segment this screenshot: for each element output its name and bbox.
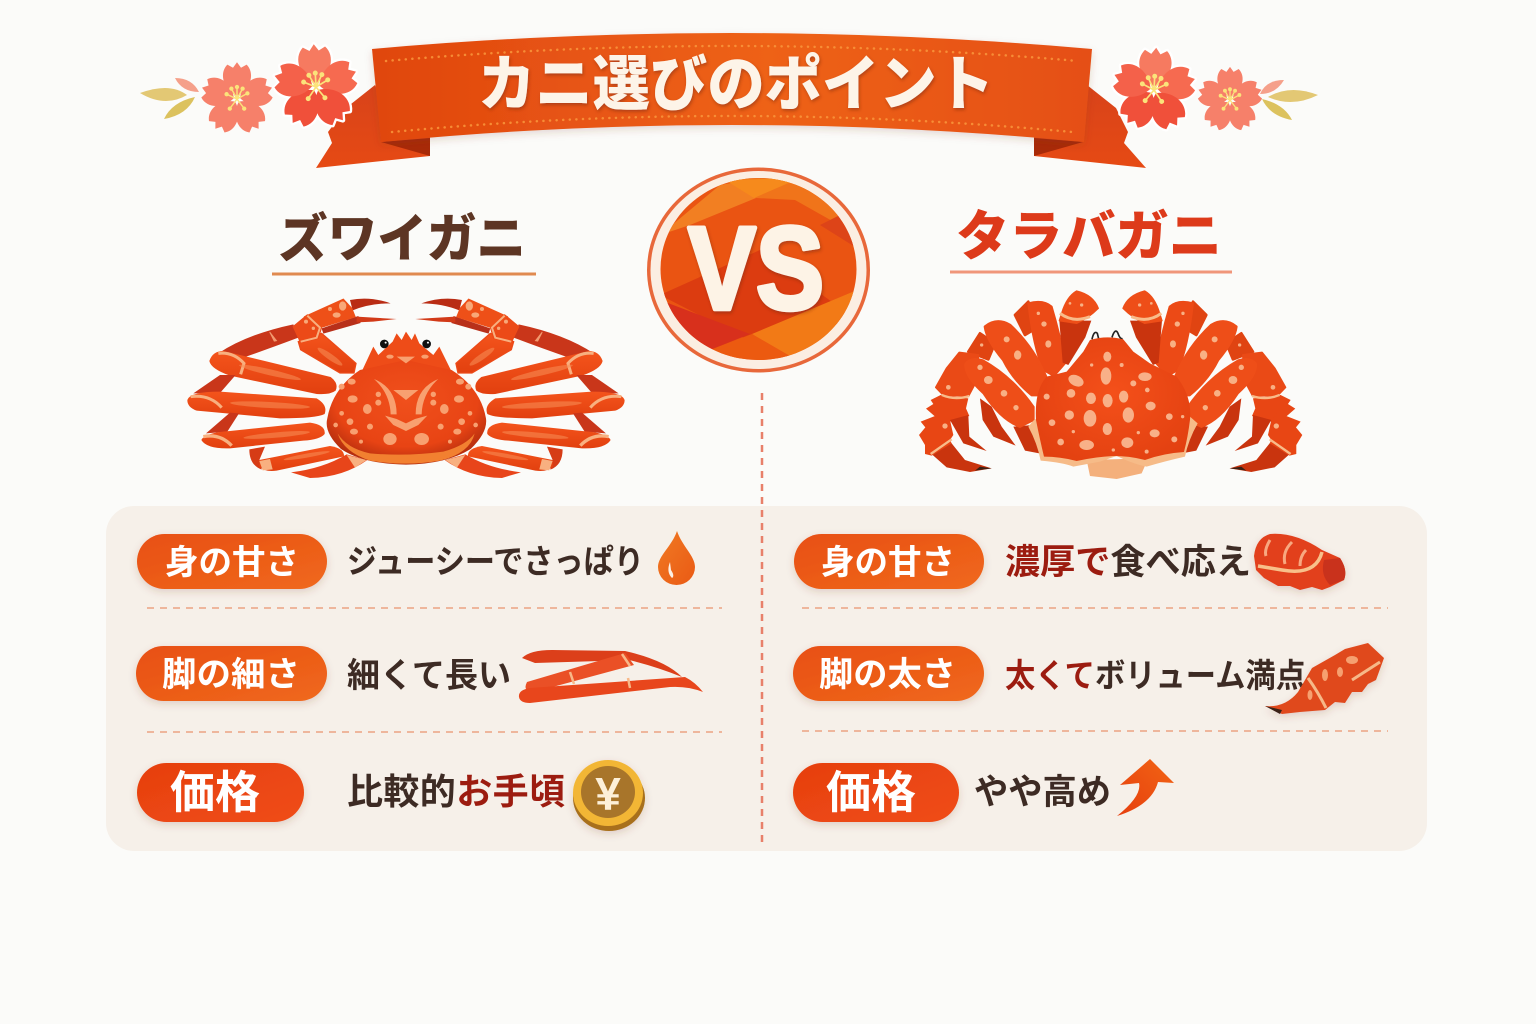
text: thick and hearty: 太くてボリューム満点 bbox=[1005, 657, 1306, 694]
pill: price bbox=[137, 763, 304, 822]
carapace bbox=[327, 360, 486, 465]
pill: price bbox=[793, 763, 959, 822]
pill: price: 価格 bbox=[826, 767, 916, 818]
small blossom bbox=[198, 62, 276, 137]
icon: water drop bbox=[658, 531, 695, 585]
title ribbon bbox=[316, 33, 1146, 168]
pill: price: 価格 bbox=[170, 767, 260, 818]
left column rows bbox=[136, 531, 722, 831]
icon: thin crab legs bbox=[519, 650, 703, 703]
shell rim bbox=[1028, 380, 1198, 467]
ribbon fold shadows bbox=[381, 138, 1083, 156]
left ribbon tail bbox=[316, 85, 430, 168]
carapace markings bbox=[333, 355, 478, 445]
pill: flesh sweetness bbox=[794, 534, 984, 589]
text: somewhat expensive: やや高め bbox=[974, 773, 1111, 812]
illustration: king crab bbox=[919, 291, 1302, 479]
pill: thin legs bbox=[136, 646, 327, 701]
right ribbon tail bbox=[1034, 85, 1146, 168]
leaves bbox=[140, 88, 187, 101]
shell spots bbox=[1044, 352, 1184, 454]
icon: king crab leg bbox=[1265, 643, 1384, 714]
carapace underside bbox=[338, 433, 475, 464]
pill: thick legs bbox=[793, 646, 984, 701]
text: rich and filling: 濃厚で食べ応え bbox=[1005, 543, 1251, 582]
right cherry blossoms bbox=[1107, 45, 1318, 136]
heading: king crab: タラバガニ bbox=[956, 207, 1222, 267]
pill: thick legs: 脚の太さ bbox=[819, 656, 956, 694]
right column rows bbox=[793, 534, 1388, 822]
icon: crab meat bbox=[1254, 534, 1345, 590]
ribbon band bbox=[372, 33, 1092, 142]
pill: flesh sweetness: 身の甘さ bbox=[165, 544, 299, 582]
ribbon stitching bbox=[386, 46, 1078, 132]
VS badge bbox=[647, 168, 870, 372]
under shell bbox=[1087, 458, 1148, 479]
icon: up arrow bbox=[1117, 759, 1174, 816]
spiked head bbox=[362, 332, 452, 372]
pill: flesh sweetness bbox=[137, 534, 327, 589]
heading: snow crab: ズワイガニ bbox=[278, 210, 526, 269]
large blossom bbox=[268, 42, 364, 134]
comparison panel bbox=[106, 506, 1427, 851]
icon: yen coin bbox=[573, 760, 645, 831]
illustration: snow crab bbox=[187, 299, 625, 478]
left cherry blossoms bbox=[140, 42, 364, 137]
text: juicy and light: ジューシーでさっぱり bbox=[347, 543, 644, 580]
title text: カニ選びのポイント bbox=[478, 51, 994, 118]
eyes bbox=[380, 340, 431, 348]
pill: thin legs: 脚の細さ bbox=[162, 656, 300, 694]
eye stalks bbox=[1092, 331, 1123, 339]
icon: yen coin: ¥ bbox=[595, 768, 621, 820]
center dashed divider bbox=[761, 393, 763, 845]
text: thin and long: 細くて長い bbox=[347, 657, 511, 695]
VS text: VS bbox=[688, 203, 824, 335]
pill: flesh sweetness: 身の甘さ bbox=[821, 544, 955, 582]
shell bbox=[1036, 337, 1190, 461]
text: relatively affordable: 比較的お手頃 bbox=[347, 771, 565, 812]
